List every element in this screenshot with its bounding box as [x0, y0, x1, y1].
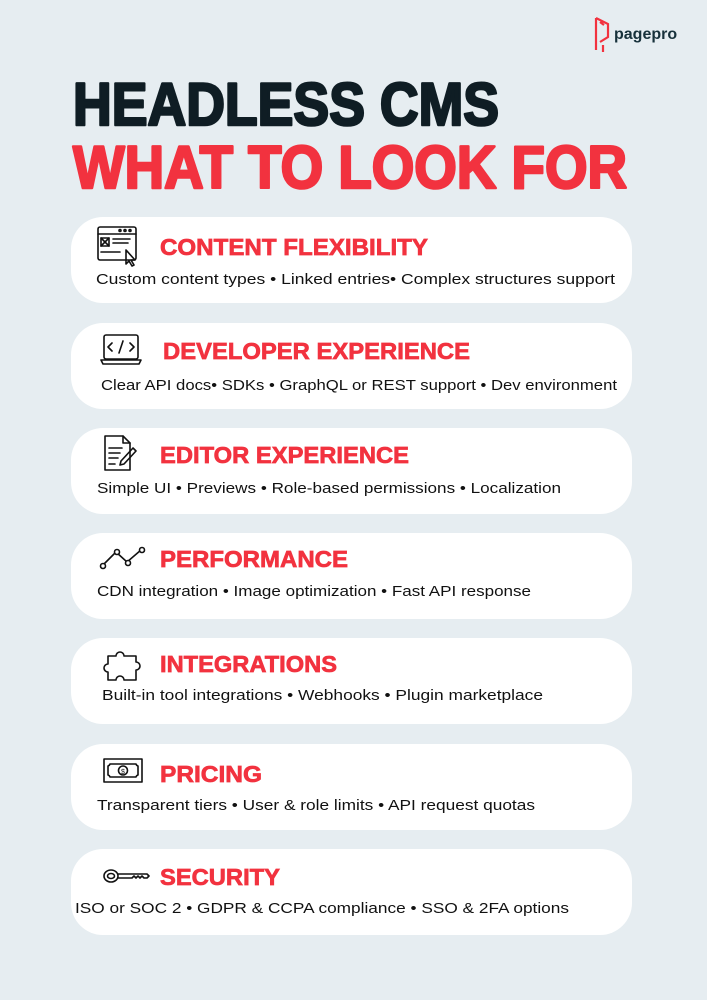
card: developer experience: Clear API docs• SDKs • GraphQL or REST support • Dev environment	[101, 377, 618, 394]
card: editor experience: Simple UI • Previews • Role-based permissions • Localization	[97, 480, 561, 497]
card: integrations: Built-in tool integrations • Webhooks • Plugin marketplace	[102, 687, 543, 704]
icon: document pen	[105, 436, 136, 470]
icon: banknote: $	[121, 769, 125, 776]
card: integrations: INTEGRATIONS	[160, 651, 337, 677]
card: pricing	[71, 744, 632, 830]
card: developer experience	[71, 323, 632, 409]
icon: banknote	[104, 759, 142, 782]
card: editor experience: EDITOR EXPERIENCE	[160, 442, 409, 468]
card: security	[71, 849, 632, 935]
card: security: ISO or SOC 2 • GDPR & CCPA compliance • SSO & 2FA options	[75, 900, 569, 917]
logo: pagepro	[596, 18, 677, 52]
title line 2: WHAT TO LOOK FOR	[73, 134, 627, 201]
icon: line chart	[100, 548, 144, 568]
logo: pagepro: pagepro	[614, 26, 677, 43]
card: pricing: Transparent tiers • User & role limits • API request quotas	[97, 797, 535, 814]
card: content flexibility: Custom content types • Linked entries• Complex structures support	[96, 271, 616, 288]
card: developer experience: DEVELOPER EXPERIENCE	[163, 338, 470, 364]
card: content flexibility	[71, 217, 632, 303]
icon: key	[104, 870, 149, 882]
card: performance	[71, 533, 632, 619]
card: integrations	[71, 638, 632, 724]
card: editor experience	[71, 428, 632, 514]
card: performance: CDN integration • Image optimization • Fast API response	[97, 583, 531, 600]
icon: puzzle	[104, 652, 140, 680]
card: performance: PERFORMANCE	[160, 546, 348, 572]
title line 1: HEADLESS CMS	[73, 71, 499, 138]
card: content flexibility: CONTENT FLEXIBILITY	[160, 234, 428, 260]
icon: laptop code	[101, 335, 141, 364]
card: pricing: PRICING	[160, 761, 262, 787]
card: security: SECURITY	[160, 864, 280, 890]
icon: browser window	[98, 227, 136, 266]
